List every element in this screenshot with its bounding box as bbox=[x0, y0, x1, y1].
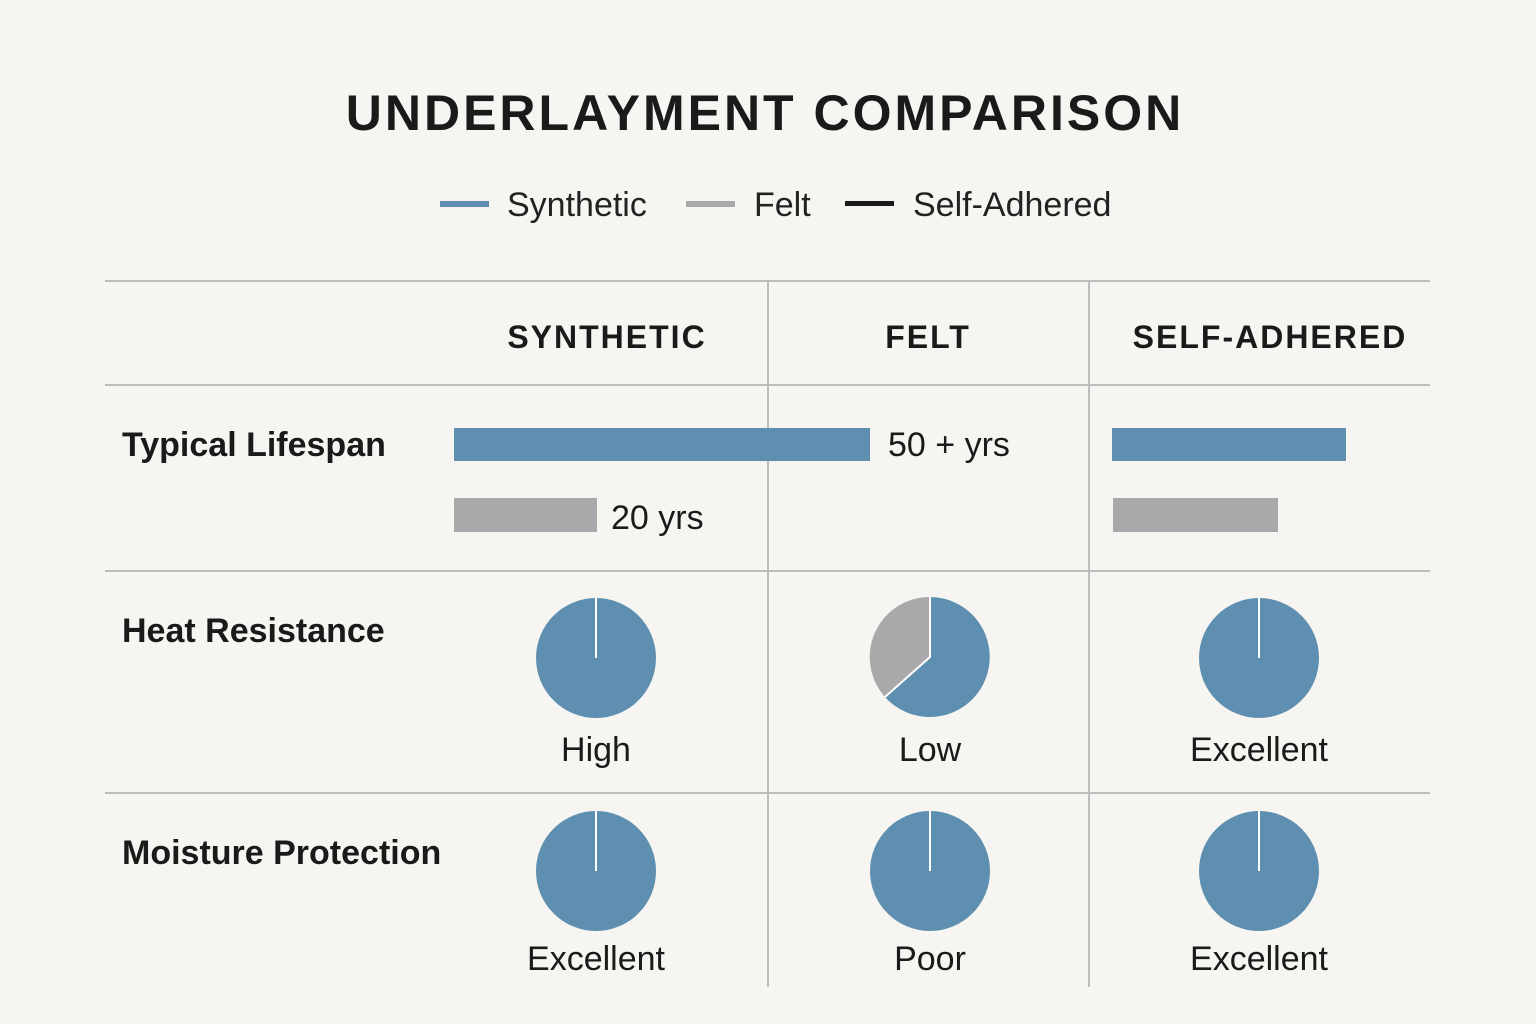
heat resistance pies: High bbox=[561, 731, 631, 769]
legend bbox=[440, 186, 1111, 224]
column headers: FELT bbox=[885, 319, 971, 355]
moisture pies: Excellent bbox=[1190, 940, 1329, 978]
lifespan bars: 50 + yrs bbox=[888, 426, 1010, 464]
legend: Felt bbox=[754, 186, 811, 224]
row labels: Typical Lifespan bbox=[122, 426, 386, 464]
row labels bbox=[122, 426, 441, 872]
column headers bbox=[507, 319, 1407, 355]
moisture pies: Excellent bbox=[527, 940, 666, 978]
lifespan bars bbox=[454, 426, 1346, 537]
moisture pies: Poor bbox=[894, 940, 966, 978]
legend: Self-Adhered bbox=[913, 186, 1111, 224]
heat resistance pies bbox=[536, 597, 1329, 769]
moisture pies bbox=[527, 811, 1329, 978]
title: UNDERLAYMENT COMPARISON bbox=[346, 85, 1184, 141]
heat resistance pies: Excellent bbox=[1190, 731, 1329, 769]
lifespan bars: 20 yrs bbox=[611, 499, 704, 537]
column headers: SYNTHETIC bbox=[507, 319, 707, 355]
row labels: Heat Resistance bbox=[122, 612, 385, 650]
column headers: SELF-ADHERED bbox=[1133, 319, 1407, 355]
heat resistance pies: Low bbox=[899, 731, 962, 769]
row labels: Moisture Protection bbox=[122, 834, 441, 872]
legend: Synthetic bbox=[507, 186, 647, 224]
